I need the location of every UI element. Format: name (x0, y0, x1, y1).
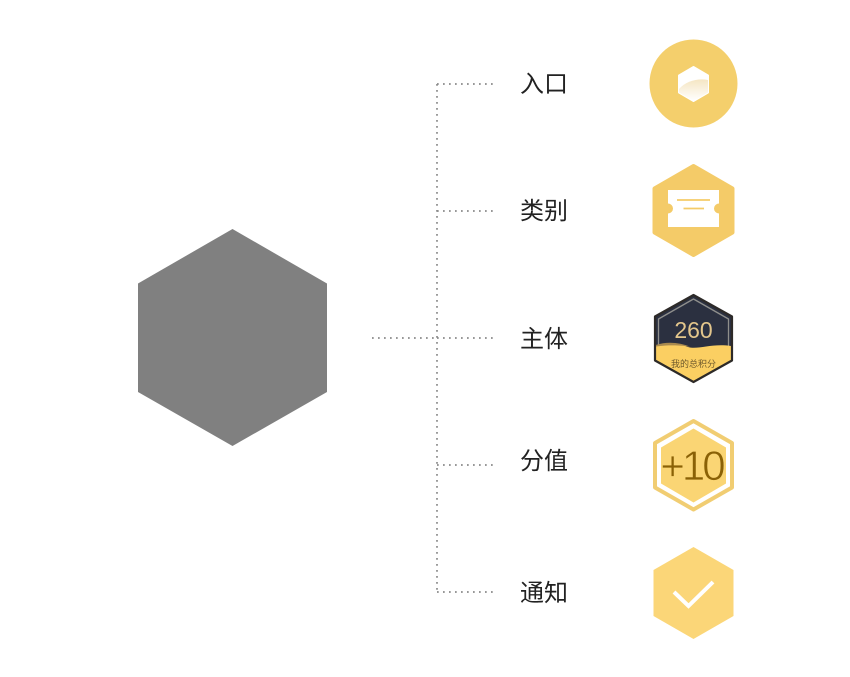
label: 类别: 类别 (520, 198, 568, 225)
icon: category hexagon with ticket (654, 166, 732, 255)
badge score number: 260 (674, 317, 713, 343)
dotted connector tree (372, 84, 497, 593)
badge caption: 我的总积分 (671, 358, 716, 369)
central grey hexagon (138, 229, 327, 446)
icon: score badge (655, 295, 732, 382)
label: 分值: 分值 (520, 448, 568, 475)
value text: +10 (660, 442, 724, 489)
icon: notification hexagon with check (654, 547, 734, 639)
icon: entry circle with cube (650, 40, 738, 128)
label: 通知: 通知 (520, 580, 568, 607)
label: 主体: 主体 (520, 326, 568, 353)
label: 入口: 入口 (520, 71, 568, 98)
icon: +10 value hexagon (655, 421, 732, 510)
